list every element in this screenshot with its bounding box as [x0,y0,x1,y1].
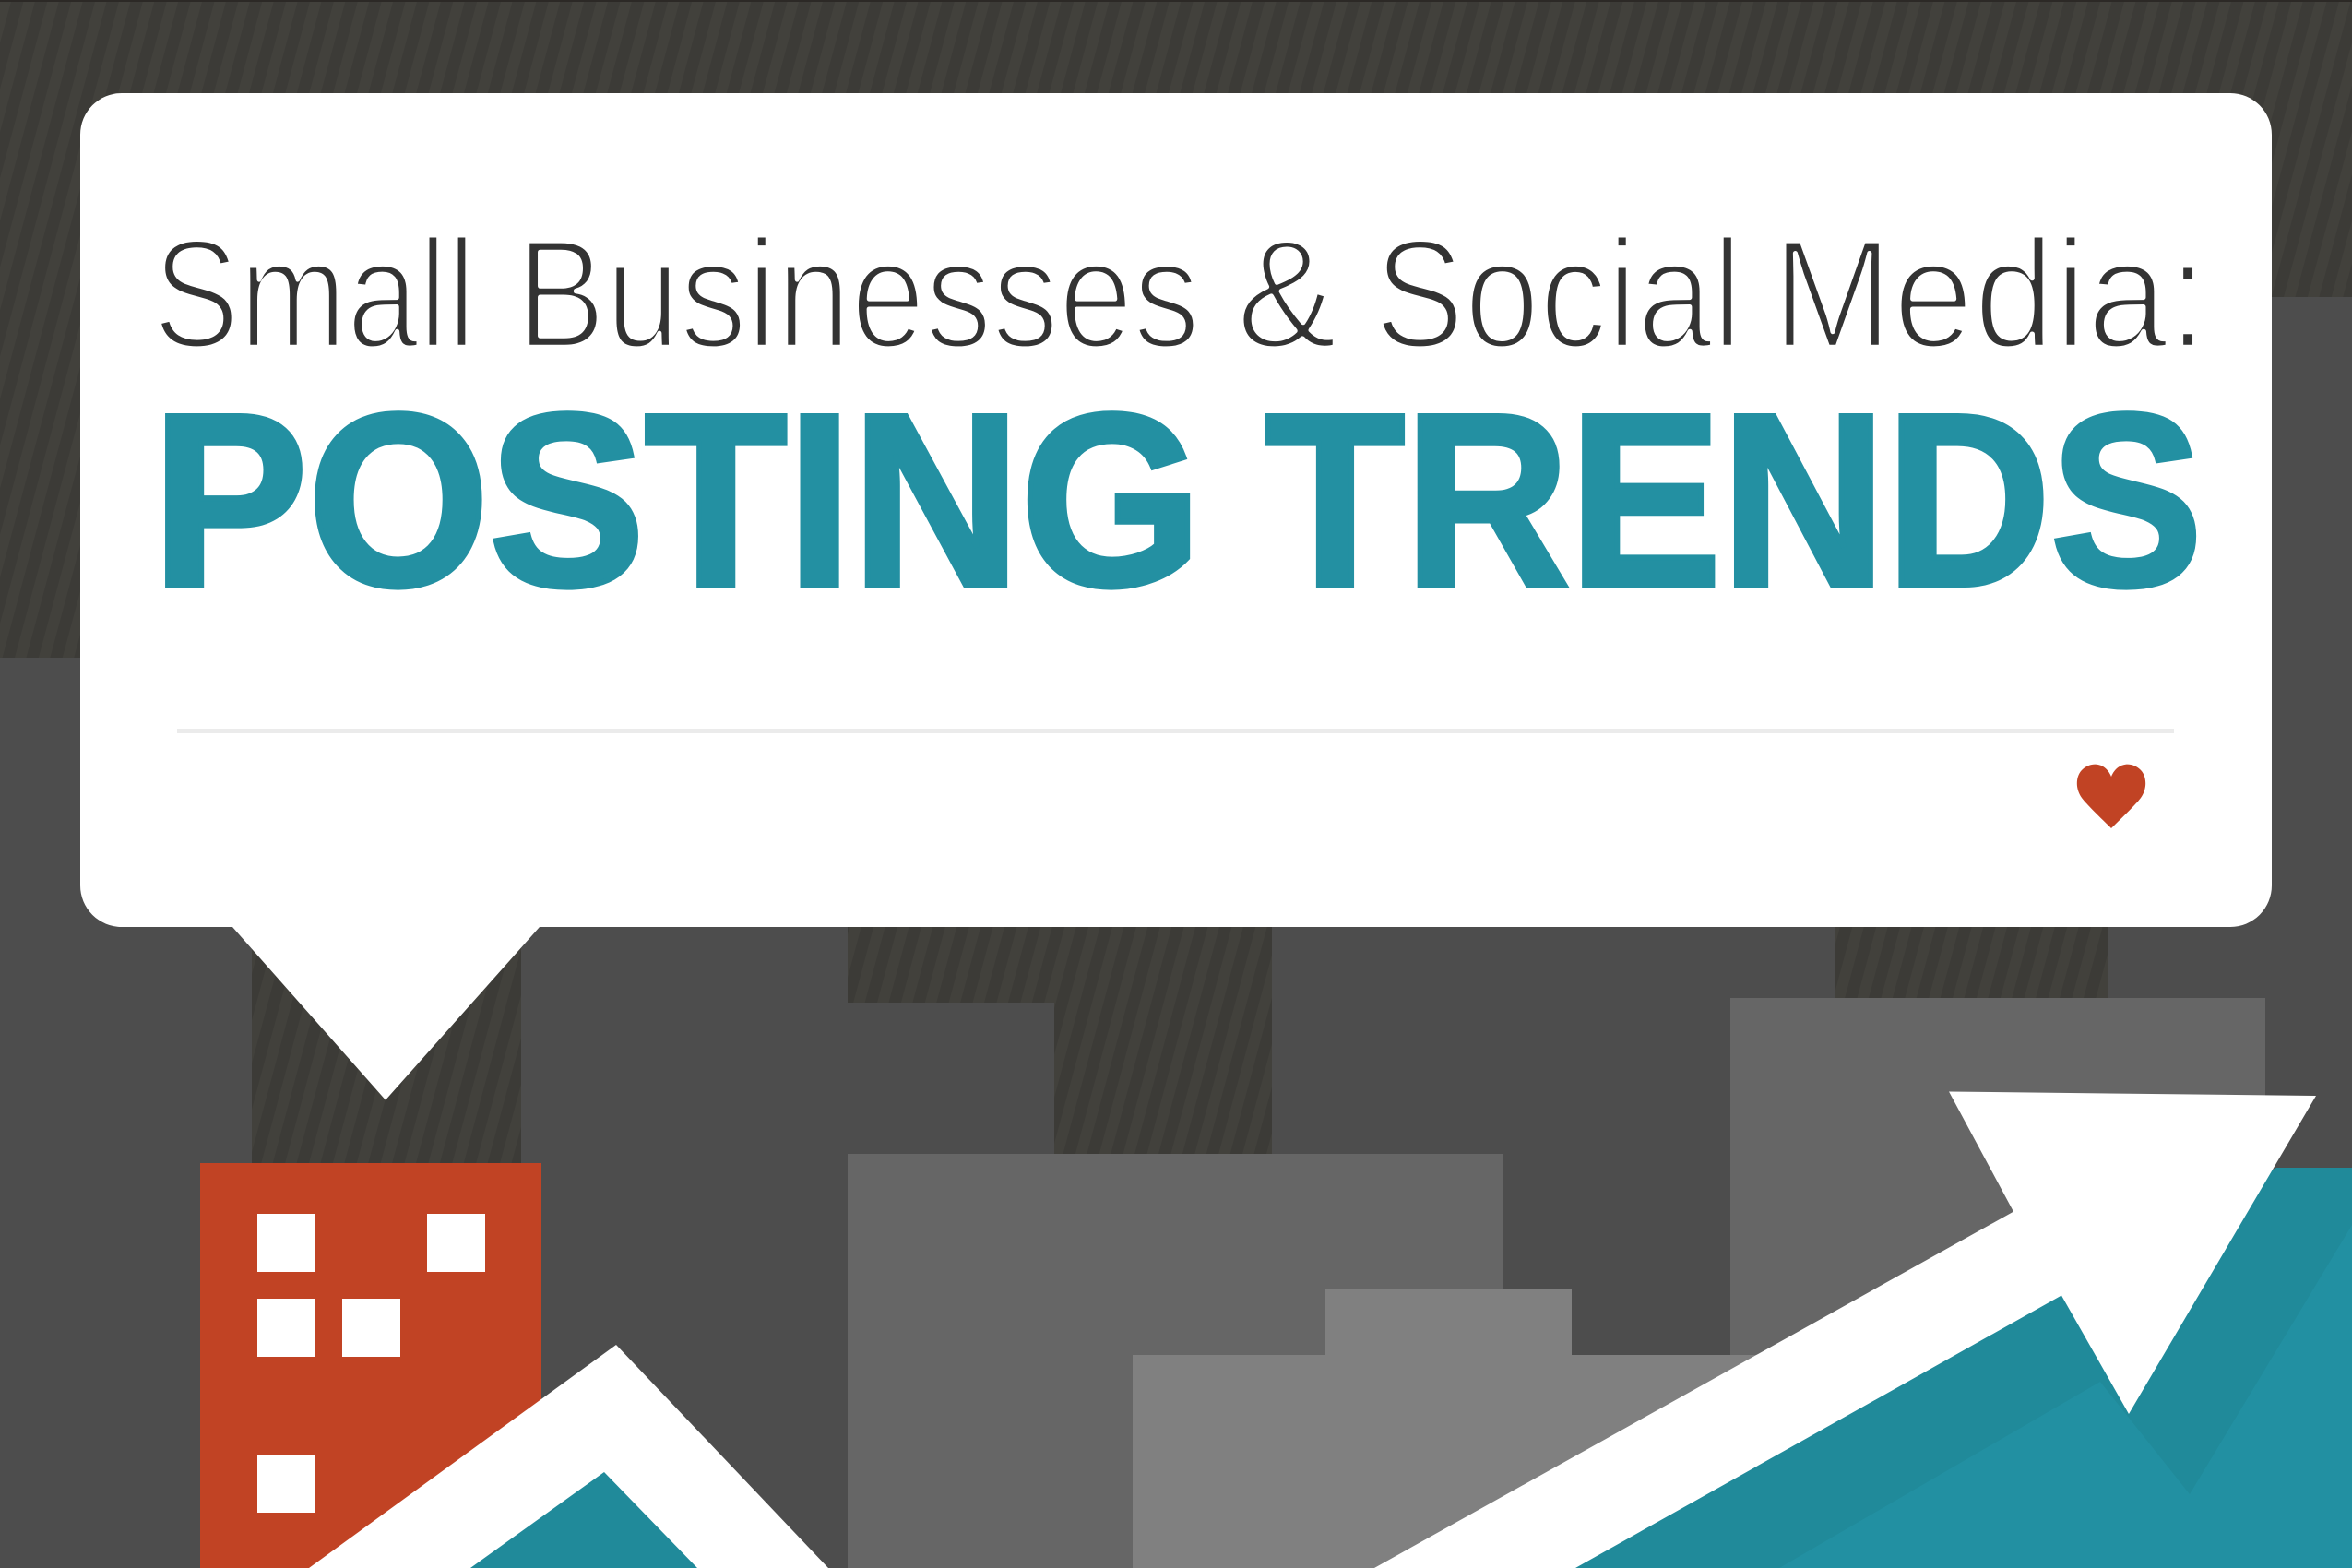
white rising arrow [1374,1092,2316,1568]
red building with windows [200,1163,541,1568]
title line 1: Businesses [517,207,1200,380]
title line 1: Small [153,207,476,380]
title line 1: Media: [1772,207,2208,380]
title line 1: & [1236,207,1337,380]
windows [257,1214,485,1513]
speech bubble panel [80,93,2272,1100]
teal house peak [470,1472,697,1568]
icon: heart [2077,765,2145,828]
title line 2: POSTING [152,363,1202,637]
teal area chart [1513,1168,2352,1568]
title line 1: Social [1374,207,1742,380]
title line 2: TRENDS [1265,363,2203,637]
title line 1 [153,207,2208,380]
title line 2 [152,363,2203,637]
white house chart peak [309,1345,828,1568]
light gray building [1133,1289,1845,1568]
divider [177,729,2174,733]
mid gray buildings [848,998,2265,1568]
